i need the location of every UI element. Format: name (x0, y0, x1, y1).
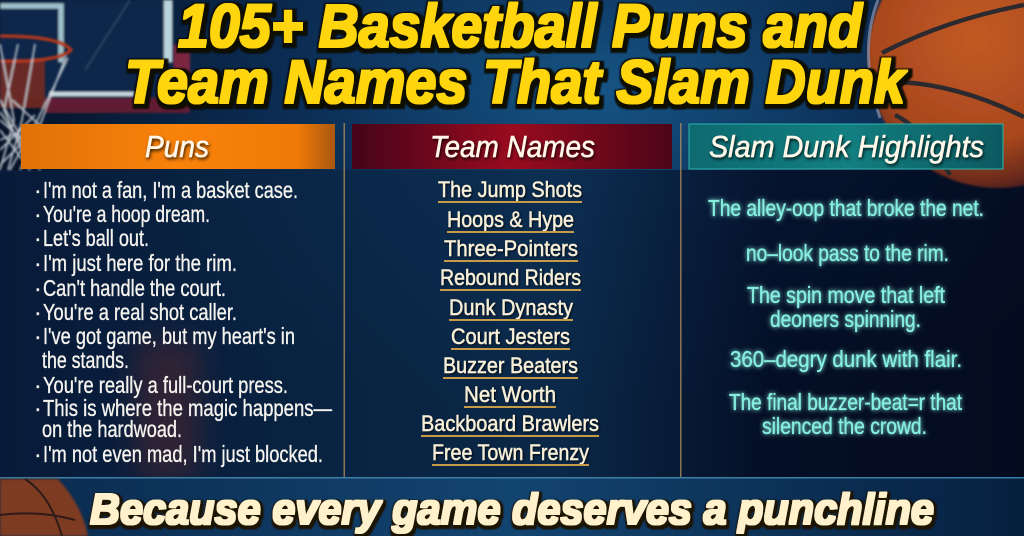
team names list: Free Town Frenzy (432, 440, 590, 465)
puns list: Let's ball out. (43, 225, 149, 251)
team names list: Net Worth (464, 382, 556, 407)
puns list: You're a hoop dream. (43, 201, 210, 227)
puns list: I'm just here for the rim. (43, 250, 237, 276)
team names list: Backboard Brawlers (421, 411, 599, 436)
tagline: Because every game deserves a punchline (90, 485, 934, 534)
team names list: Three-Pointers (444, 236, 578, 261)
puns list: You're really a full-court press. (43, 372, 288, 398)
team names list: Dunk Dynasty (449, 295, 574, 320)
panel: team names (352, 124, 672, 466)
puns list: the stands. (42, 347, 129, 373)
puns list: · (34, 201, 42, 227)
icon: basketball top right (868, 0, 1024, 188)
puns list: I'm not a fan, I'm a basket case. (43, 177, 298, 203)
puns list: You're a real shot caller. (43, 299, 237, 325)
puns list: · (34, 250, 42, 276)
puns list: · (34, 372, 42, 398)
highlights list: silenced the crowd. (762, 413, 927, 439)
title: Team Names That Slam Dunk (125, 48, 908, 116)
highlights list: no–look pass to the rim. (746, 240, 949, 266)
puns list: This is where the magic happens— (43, 395, 332, 421)
team names list: Court Jesters (451, 324, 570, 349)
highlights list: deoners spinning. (770, 306, 921, 332)
puns list: · (34, 323, 42, 349)
heading: slam dunk highlights: Slam Dunk Highlights (709, 129, 984, 164)
team names list: Rebound Riders (440, 265, 581, 290)
puns list: · (34, 441, 42, 467)
puns list: · (34, 299, 42, 325)
heading: team names: Team Names (430, 129, 595, 164)
team names list: Buzzer Beaters (443, 353, 578, 378)
puns list: · (34, 225, 42, 251)
team names list (421, 177, 599, 466)
backboard (0, 0, 190, 113)
puns list (34, 177, 332, 467)
puns list: on the hardwoad. (42, 416, 182, 442)
heading: team names (352, 124, 672, 169)
highlights list: The final buzzer-beat=r that (729, 389, 962, 415)
column dividers (344, 123, 682, 478)
team names list: The Jump Shots (438, 177, 582, 202)
icon: hoop and net (0, 36, 71, 170)
title (125, 0, 908, 116)
puns list: · (34, 395, 42, 421)
panel: puns (21, 124, 335, 467)
puns list: · (34, 275, 42, 301)
team names list: Hoops & Hype (447, 207, 574, 232)
highlights list: The spin move that left (747, 282, 945, 308)
puns list: Can't handle the court. (43, 275, 226, 301)
highlights list (708, 195, 984, 439)
panel: slam dunk highlights (689, 124, 1003, 439)
highlights list: 360–degry dunk with flair. (730, 346, 962, 372)
icon: basketball bottom left (0, 479, 88, 536)
heading: puns: Puns (145, 129, 209, 164)
heading: puns (21, 124, 335, 169)
puns list: I've got game, but my heart's in (43, 323, 295, 349)
puns list: · (34, 177, 42, 203)
footer band (0, 477, 1024, 536)
puns list: I'm not even mad, I'm just blocked. (43, 441, 323, 467)
